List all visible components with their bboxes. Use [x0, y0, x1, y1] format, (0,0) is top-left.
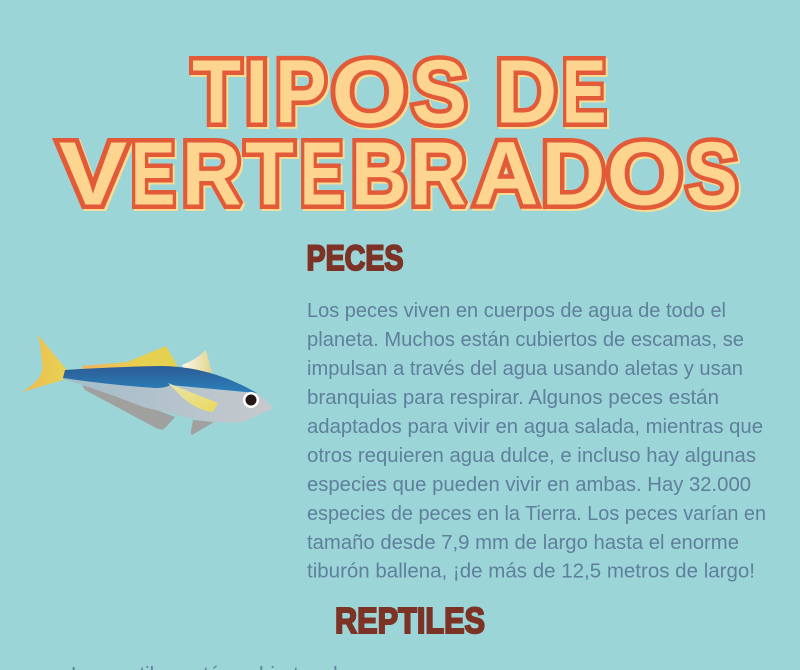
text block: peces: adaptados para vivir en agua salada, mientras que: [307, 415, 763, 438]
title: V: [59, 124, 127, 224]
title: E: [562, 42, 606, 142]
title: O: [606, 124, 683, 224]
title: [59, 42, 738, 224]
text block: peces: planeta. Muchos están cubiertos de escamas, se: [307, 328, 744, 351]
heading: reptiles: REPTILES: [335, 600, 485, 641]
title: T: [192, 42, 241, 142]
title: D: [496, 42, 557, 142]
title: B: [351, 124, 407, 224]
text block: peces: [307, 299, 766, 582]
title: I: [245, 42, 269, 142]
text block: peces: tiburón ballena, ¡de más de 12,5 metros de largo!: [307, 560, 755, 582]
title: S: [686, 124, 738, 224]
heading: peces: PECES: [306, 239, 404, 278]
text block: peces: impulsan a través del agua usando aletas y usan: [307, 357, 743, 380]
icon: fish: [22, 335, 274, 435]
text block: peces: tamaño desde 7,9 mm de largo hasta el enorme: [307, 531, 739, 554]
title: D: [541, 124, 605, 224]
title: E: [131, 124, 175, 224]
text block: peces: branquias para respirar. Algunos peces están: [307, 386, 719, 409]
text block: peces: otros requieren agua dulce, e incluso hay algunas: [307, 444, 756, 467]
title: O: [331, 42, 408, 142]
title: P: [275, 42, 327, 142]
text block: peces: Los peces viven en cuerpos de agua de todo el: [307, 299, 726, 322]
title: A: [474, 124, 538, 224]
text block: peces: especies que pueden vivir en ambas. Hay 32.000: [307, 473, 751, 496]
title: R: [410, 124, 467, 224]
title: R: [182, 124, 242, 224]
title: E: [300, 124, 343, 224]
text block: peces: especies de peces en la Tierra. Los peces varían en: [307, 502, 766, 525]
title: S: [412, 42, 467, 142]
title: T: [245, 124, 294, 224]
